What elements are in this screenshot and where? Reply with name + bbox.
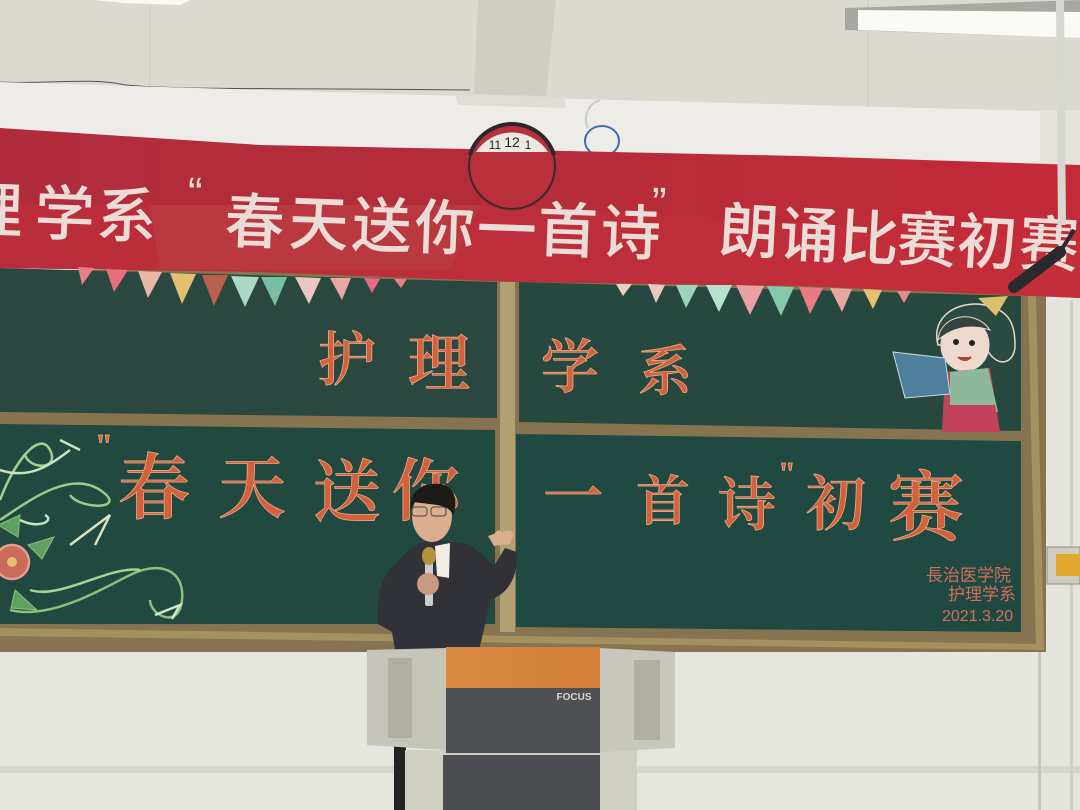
chalk title: upper row (318, 328, 692, 402)
board: upper left (0, 268, 497, 418)
wall clock: 12 (504, 134, 520, 150)
ceiling (0, 0, 1080, 112)
chalk title: lower row: 春 (118, 449, 190, 529)
wall clock: 11 (489, 138, 502, 152)
banner text: 赛 (895, 206, 959, 276)
chalk title: lower row (95, 427, 968, 551)
banner text: 一 (476, 196, 538, 265)
banner text: “ (188, 169, 203, 218)
chalk title: lower row: 一 (543, 465, 603, 531)
banner text: 你 (414, 194, 476, 263)
ceiling lamp right (845, 0, 1080, 38)
chalkboards (0, 268, 1046, 652)
board: lower left (0, 424, 495, 624)
banner text: 诵 (777, 201, 841, 271)
banner text: 送 (351, 192, 413, 261)
chalk signature: 長治医学院 (926, 566, 1011, 585)
chalk title: lower row: 赛 (888, 467, 968, 551)
microphone and hand (425, 560, 433, 606)
board: upper right (519, 282, 1021, 431)
lectern (367, 647, 675, 810)
banner text: 赛 (1017, 210, 1080, 280)
jacket (377, 540, 517, 652)
frame (0, 270, 1046, 652)
chalk title: lower row: 天 (218, 451, 286, 527)
chalk floral drawing (0, 440, 182, 619)
chalk title: upper row: 护 (318, 328, 376, 393)
banner text (0, 169, 1080, 280)
lectern: FOCUS (556, 692, 592, 703)
ceiling lamp left (95, 0, 190, 5)
chalk title: lower row: 诗 (718, 473, 776, 538)
banner text: ” (652, 179, 667, 228)
chalk title: lower row: 首 (636, 472, 690, 532)
chalk title: lower row: " (95, 427, 113, 463)
microphone boom top right (1014, 0, 1074, 287)
bunting flags left (78, 267, 407, 307)
wall clock (469, 123, 555, 209)
board: lower right (516, 434, 1021, 632)
wire loop (585, 100, 619, 156)
banner text: 学 (34, 180, 96, 249)
banner text: 朗 (717, 197, 781, 267)
head (412, 490, 452, 542)
wall switch box (1047, 547, 1080, 584)
chalk signature: 护理学系 (948, 585, 1016, 604)
speaker (377, 484, 517, 810)
chalk title: upper row: 理 (408, 331, 470, 399)
chalk title: lower row: 送 (313, 455, 381, 531)
banner text: 比 (837, 204, 901, 274)
wall clock: 1 (525, 138, 532, 152)
chalk title: lower row: 你 (392, 454, 464, 530)
banner text: 首 (537, 197, 599, 266)
raised hand (488, 530, 514, 546)
banner text: 初 (955, 208, 1019, 278)
banner text: 诗 (600, 199, 662, 268)
banner text: 天 (288, 190, 350, 259)
chalk signature: 2021.3.20 (942, 608, 1013, 625)
banner text: 系 (96, 182, 158, 251)
chalk title: upper row: 系 (638, 342, 692, 402)
red banner (0, 128, 1080, 298)
chalk title: lower row: 初 (806, 472, 866, 538)
chalk title: lower row: " (778, 455, 796, 491)
chalk girl reading (893, 296, 1015, 432)
chalk title: upper row: 学 (541, 335, 599, 400)
chalk signature (926, 566, 1016, 625)
bunting flags right (616, 284, 911, 316)
banner text: 春 (224, 188, 286, 257)
